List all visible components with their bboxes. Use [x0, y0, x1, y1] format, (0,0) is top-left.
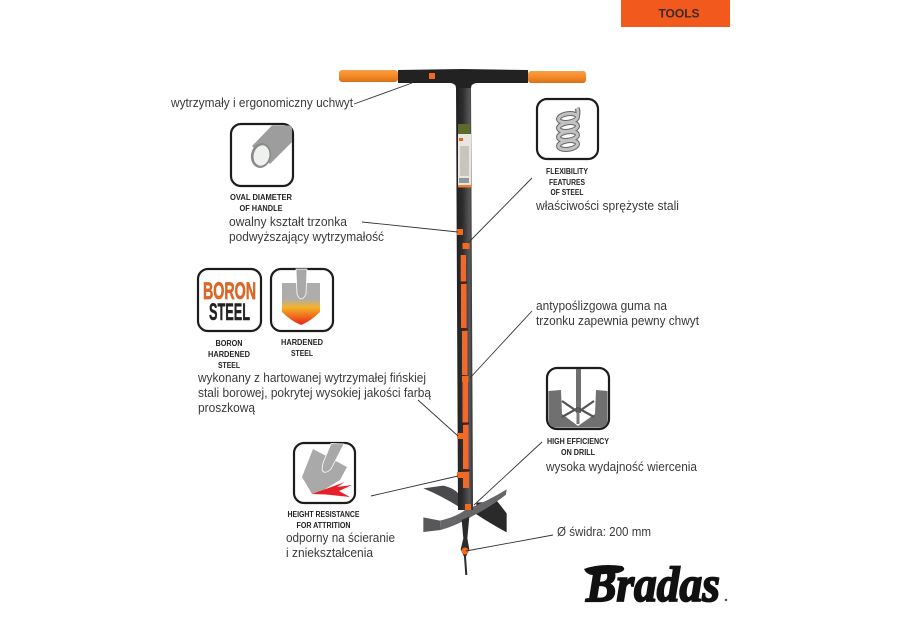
caption: attrition resistance — [288, 510, 360, 530]
caption: flexibility: OF STEEL — [550, 188, 584, 197]
leader: diameter — [466, 535, 553, 551]
caption: boron steel: BORON — [216, 339, 243, 348]
text: attrition resistance: odporny na ścieranie — [286, 531, 395, 545]
icon: attrition resistance — [294, 443, 355, 503]
text: anti-slip grip: trzonku zapewnia pewny chwyt — [536, 314, 699, 328]
icon: boron steel: STEEL — [209, 299, 250, 326]
text: handle: wytrzymały i ergonomiczny uchwyt — [170, 96, 353, 110]
leader: oval shaft — [362, 222, 458, 232]
icon: flexibility spring — [537, 99, 598, 159]
text: steel description — [197, 371, 431, 415]
text: attrition resistance — [286, 531, 395, 560]
text: attrition resistance: i zniekształcenia — [286, 546, 373, 560]
leader: handle — [354, 83, 412, 104]
leader: drilling — [474, 442, 542, 505]
text: oval shaft: podwyższający wytrzymałość — [229, 230, 384, 244]
caption: oval diameter: OF HANDLE — [240, 204, 283, 213]
caption: hardened steel: STEEL — [291, 349, 313, 358]
text: drilling efficiency: wysoka wydajność wiercenia — [545, 460, 697, 474]
markers — [457, 229, 463, 235]
caption: boron steel — [208, 339, 250, 370]
text: steel description: stali borowej, pokrytej wysokiej jakości farbą — [198, 386, 431, 400]
text: auger diameter: Ø świdra: 200 mm — [557, 525, 651, 539]
text: oval shaft — [229, 215, 384, 244]
text: anti-slip grip — [536, 299, 699, 328]
T-handle — [398, 69, 528, 88]
text: flexibility: właściwości sprężyste stali — [535, 199, 679, 213]
text: steel description: wykonany z hartowanej wytrzymałej fińskiej — [197, 371, 426, 385]
icon: hardened steel — [271, 269, 333, 331]
leader: grip — [470, 311, 532, 378]
caption: oval diameter — [230, 193, 292, 213]
auger blades — [423, 486, 507, 575]
caption: flexibility: FLEXIBILITY — [546, 167, 589, 176]
icon: boron steel: BORON — [203, 278, 256, 305]
text: steel description: proszkową — [198, 401, 255, 415]
caption: attrition resistance: HEIGHT RESISTANCE — [288, 510, 360, 519]
product sticker — [458, 124, 470, 134]
shaft — [456, 79, 473, 510]
leader: steel — [418, 400, 458, 436]
leader: flexibility — [468, 178, 532, 243]
caption: flexibility: FEATURES — [549, 178, 586, 187]
icon: boron steel — [198, 269, 261, 331]
caption: oval diameter: OVAL DIAMETER — [230, 193, 292, 202]
caption: hardened steel: HARDENED — [281, 338, 323, 347]
rubber grip strips — [461, 255, 466, 282]
icon: drilling efficiency — [547, 368, 609, 429]
category tab: TOOLS: TOOLS — [658, 6, 700, 20]
icon: oval diameter of handle — [231, 124, 293, 186]
caption: drilling efficiency — [547, 437, 610, 457]
caption: boron steel: STEEL — [218, 361, 240, 370]
leader: attrition — [371, 476, 458, 496]
logo: Bradas: Bradas — [585, 556, 720, 612]
category tab: TOOLS — [621, 0, 730, 27]
text: anti-slip grip: antypoślizgowa guma na — [536, 299, 667, 313]
caption: flexibility — [546, 167, 589, 197]
caption: drilling efficiency: HIGH EFFICIENCY — [547, 437, 610, 446]
caption: boron steel: HARDENED — [208, 350, 250, 359]
product illustration: garden auger — [339, 69, 586, 575]
text: oval shaft: owalny kształt trzonka — [229, 215, 347, 229]
caption: attrition resistance: FOR ATTRITION — [296, 521, 351, 530]
caption: drilling efficiency: ON DRILL — [561, 448, 595, 457]
caption: hardened steel — [281, 338, 323, 358]
